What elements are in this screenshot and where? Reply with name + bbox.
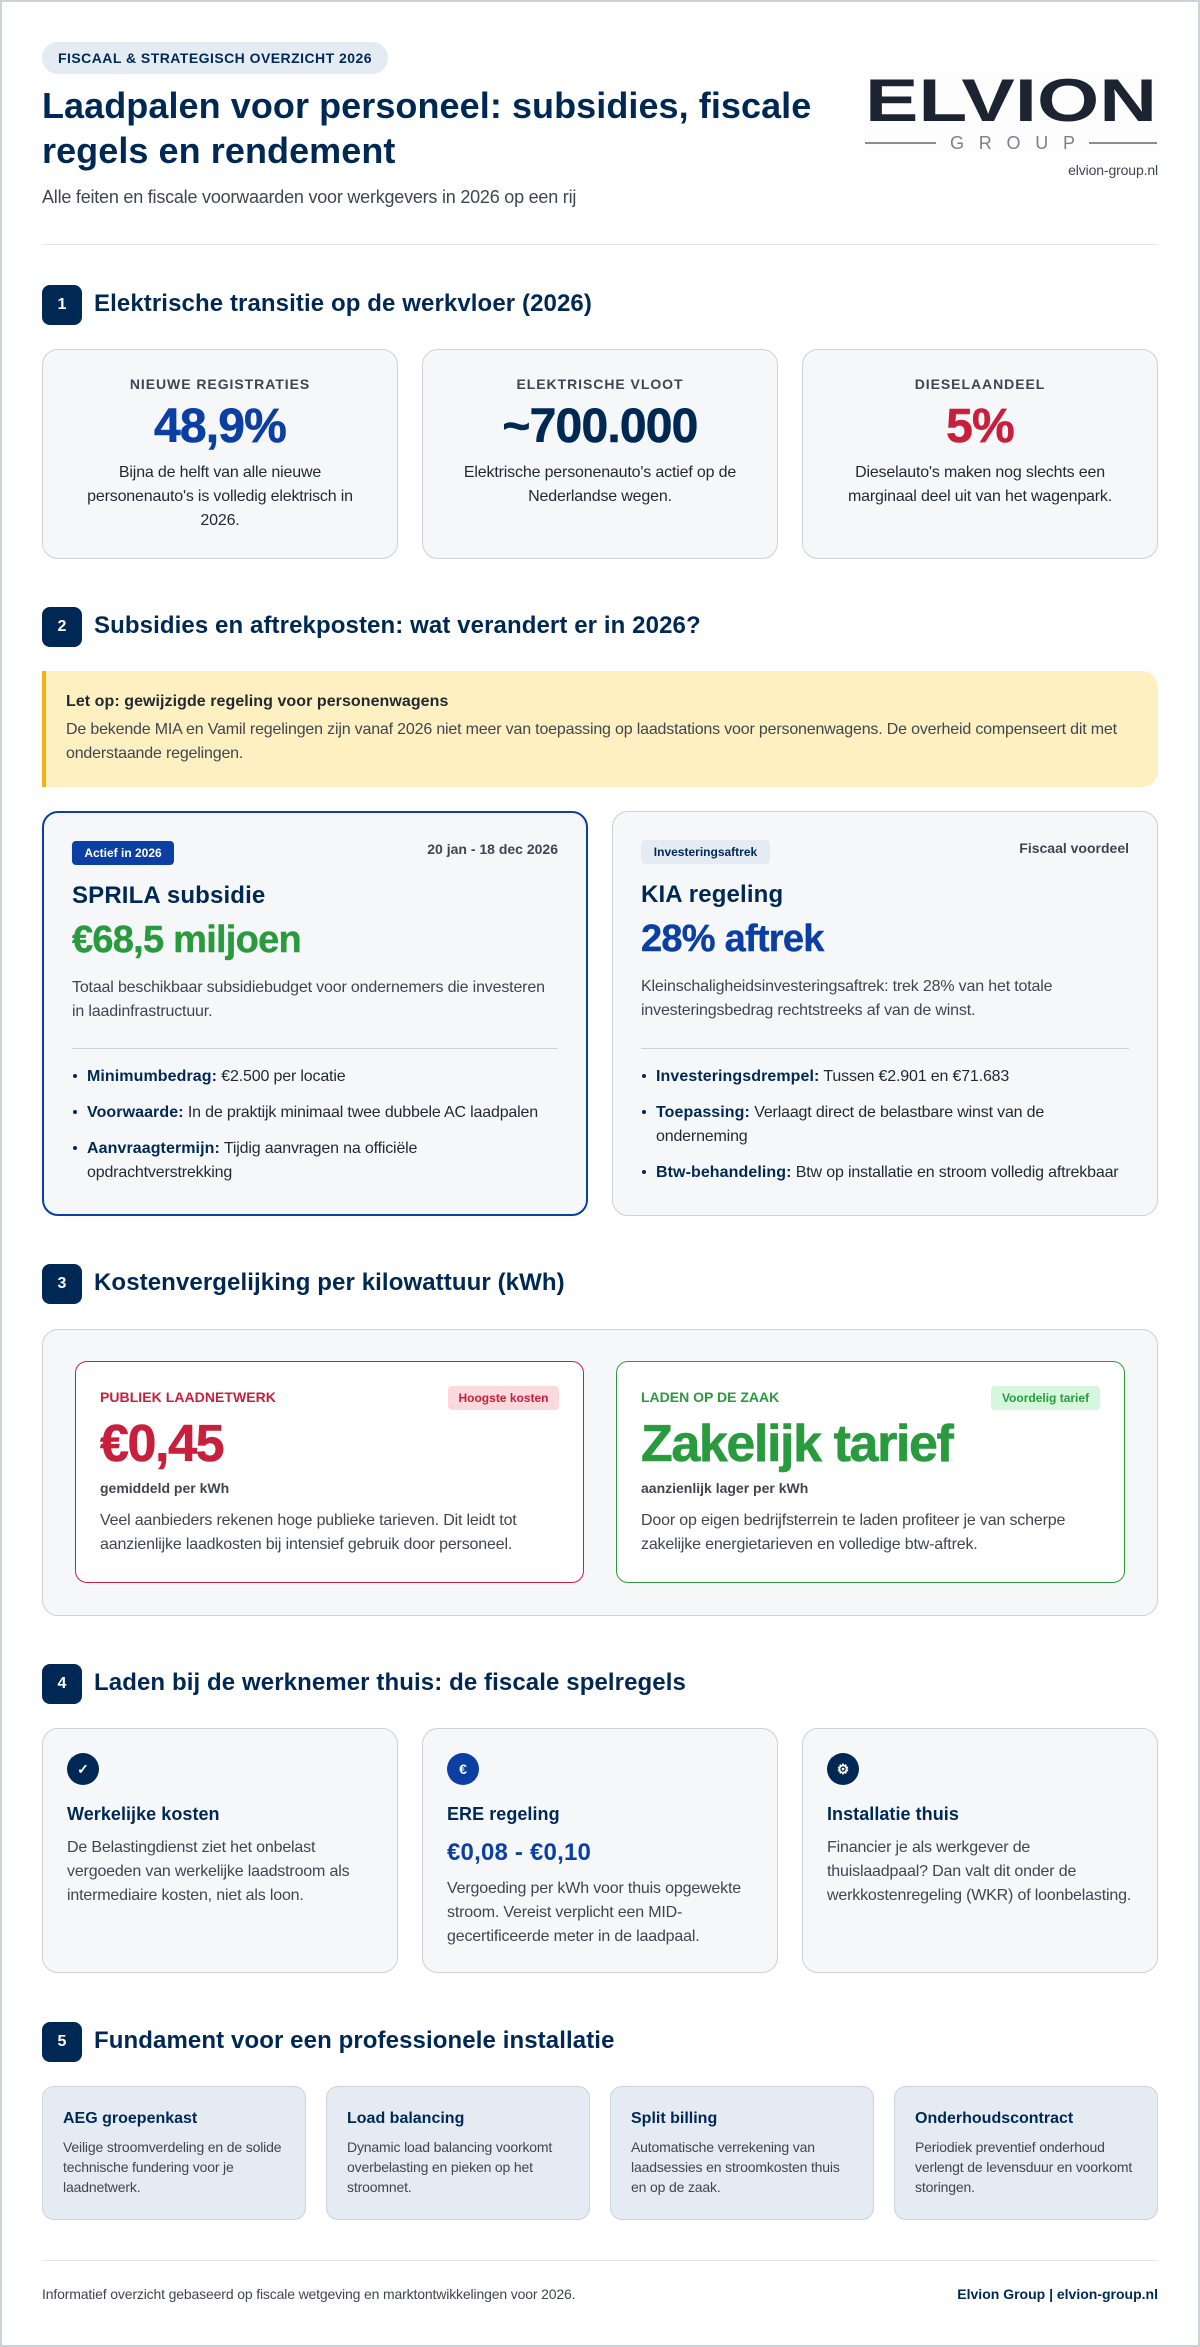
bullet list: Minimumbedrag: €2.500 per locatie [87, 1068, 345, 1085]
card title: ERE regeling [447, 1804, 560, 1824]
stat card: elektrische vloot [422, 349, 778, 559]
section 3 badge [42, 1264, 82, 1304]
stat card: dieselaandeel: marginaal deel uit van het wagenpark. [848, 488, 1112, 505]
icon: euro [447, 1753, 479, 1785]
bullet list: opdrachtverstrekking [87, 1164, 232, 1181]
description: aanzienlijke laadkosten bij intensief gebruik door personeel. [100, 1536, 512, 1553]
section 1 badge: 1 [58, 296, 66, 313]
card: onderhoudscontract [894, 2086, 1158, 2220]
tag: voordelig tarief [991, 1386, 1100, 1410]
section 2 heading: Subsidies en aftrekposten: wat verandert er in 2026? [94, 612, 701, 639]
tag: voordelig tarief: Voordelig tarief [1002, 1391, 1089, 1405]
tag: hoogste kosten: Hoogste kosten [458, 1391, 548, 1405]
benefit label: Fiscaal voordeel [1019, 840, 1129, 856]
stat card: nieuwe registraties: personenauto's is volledig elektrisch in [87, 488, 353, 505]
card text [67, 1839, 349, 1904]
label: PUBLIEK LAADNETWERK [100, 1389, 276, 1405]
website label: elvion-group.nl [1068, 162, 1158, 178]
stat card: dieselaandeel [802, 349, 1158, 559]
card: AEG groepenkast: technische fundering voor je [63, 2159, 234, 2175]
section 4 badge [42, 1664, 82, 1704]
card: installatie thuis [802, 1728, 1158, 1973]
description [641, 1512, 1065, 1553]
card: split billing: Split billing [631, 2110, 717, 2127]
icon: euro: € [459, 1761, 467, 1777]
stat card: nieuwe registraties: 2026. [200, 512, 240, 529]
card: split billing: laadsessies en stroomkosten thuis [631, 2159, 840, 2175]
section 2 badge [42, 607, 82, 647]
footer note: Informatief overzicht gebaseerd op fiscale wetgeving en marktontwikkelingen voor 2026. [42, 2286, 575, 2302]
card: load balancing: Dynamic load balancing voorkomt [347, 2139, 552, 2155]
callout: let op: onderstaande regelingen. [66, 745, 243, 762]
card: AEG groepenkast [42, 2086, 306, 2220]
card text: Vergoeding per kWh voor thuis opgewekte [447, 1880, 741, 1897]
bullet list: onderneming [656, 1128, 748, 1145]
stat card: nieuwe registraties: Bijna de helft van alle nieuwe [119, 464, 321, 481]
card: split billing: en op de zaak. [631, 2179, 721, 2195]
tag: actief in 2026 [72, 841, 174, 865]
description: Door op eigen bedrijfsterrein te laden profiteer je van scherpe [641, 1512, 1065, 1529]
card text [447, 1880, 741, 1945]
card: split billing [610, 2086, 874, 2220]
card text: vergoeden van werkelijke laadstroom als [67, 1863, 349, 1880]
tag: investeringsaftrek: Investeringsaftrek [654, 845, 757, 859]
card: onderhoudscontract: Periodiek preventief onderhoud [915, 2139, 1105, 2155]
price note: aanzienlijk lager per kWh [641, 1480, 808, 1496]
card: onderhoudscontract: storingen. [915, 2179, 975, 2195]
section 5 badge [42, 2022, 82, 2062]
stat card: elektrische vloot: Elektrische personenauto's actief op de [464, 464, 736, 481]
price: Zakelijk tarief [641, 1415, 952, 1473]
card text: stroom. Vereist verplicht een MID- [447, 1904, 682, 1921]
tag: investeringsaftrek [641, 840, 770, 864]
icon: gear: ⚙ [837, 1761, 849, 1777]
tariff: €0,08 - €0,10 [447, 1839, 591, 1866]
section 3 badge: 3 [58, 1275, 66, 1292]
icon: check: ✓ [77, 1761, 89, 1777]
stat card: nieuwe registraties [42, 349, 398, 559]
regulation amount: 28% aftrek [641, 918, 824, 960]
section 4 badge: 4 [58, 1675, 66, 1692]
section 1 heading: Elektrische transitie op de werkvloer (2026) [94, 290, 592, 317]
card: werkelijke kosten [42, 1728, 398, 1973]
date range: 20 jan - 18 dec 2026 [427, 841, 558, 857]
panel: KIA regeling [612, 811, 1158, 1216]
label: LADEN OP DE ZAAK [641, 1389, 779, 1405]
card: AEG groepenkast: laadnetwerk. [63, 2179, 140, 2195]
card text: intermediaire kosten, niet als loon. [67, 1887, 304, 1904]
subsidy name: SPRILA subsidie [72, 882, 265, 909]
bullet list: Btw-behandeling: Btw op installatie en stroom volledig aftrekbaar [656, 1164, 1118, 1181]
bullet list: Aanvraagtermijn: Tijdig aanvragen na officiële [87, 1140, 417, 1157]
stat card: dieselaandeel: 5% [946, 400, 1014, 453]
title [42, 85, 811, 171]
description: Veel aanbieders rekenen hoge publieke tarieven. Dit leidt tot [100, 1512, 517, 1529]
callout: let op: Let op: gewijzigde regeling voor personenwagens [66, 693, 448, 710]
comparison card: laden op de zaak [616, 1361, 1125, 1583]
price note: gemiddeld per kWh [100, 1480, 229, 1496]
subtitle: Alle feiten en fiscale voorwaarden voor werkgevers in 2026 op een rij [42, 187, 576, 207]
card: load balancing: stroomnet. [347, 2179, 412, 2195]
section 1 badge [42, 285, 82, 325]
bullet list: Toepassing: Verlaagt direct de belastbare winst van de [656, 1104, 1044, 1121]
section 5 heading: Fundament voor een professionele installatie [94, 2027, 615, 2054]
stat card: elektrische vloot: ~700.000 [502, 400, 698, 453]
title: Laadpalen voor personeel: subsidies, fiscale [42, 85, 811, 126]
stat card: elektrische vloot: ELEKTRISCHE VLOOT [516, 376, 684, 392]
title: regels en rendement [42, 130, 395, 171]
card: split billing: Automatische verrekening van [631, 2139, 815, 2155]
bullet list: Voorwaarde: In de praktijk minimaal twee dubbele AC laadpalen [87, 1104, 538, 1121]
section 5 badge: 5 [58, 2033, 66, 2050]
panel: kostenvergelijking [42, 1329, 1158, 1616]
card: AEG groepenkast: Veilige stroomverdeling en de solide [63, 2139, 281, 2155]
stat card: dieselaandeel: DIESELAANDEEL [915, 376, 1045, 392]
subsidy description: in laadinfrastructuur. [72, 1003, 212, 1020]
bullet list: Investeringsdrempel: Tussen €2.901 en €71.683 [656, 1068, 1009, 1085]
card title: Installatie thuis [827, 1804, 959, 1824]
regulation description: Kleinschaligheidsinvesteringsaftrek: trek 28% van het totale [641, 978, 1052, 995]
header pill [42, 42, 388, 74]
stat card: nieuwe registraties: NIEUWE REGISTRATIES [130, 376, 310, 392]
bullet list [73, 1068, 538, 1181]
description: zakelijke energietarieven en volledige btw-aftrek. [641, 1536, 978, 1553]
regulation name: KIA regeling [641, 881, 783, 908]
logo: Elvion Group: GROUP [950, 133, 1075, 153]
card title: Werkelijke kosten [67, 1804, 220, 1824]
section 2 badge: 2 [58, 618, 66, 635]
card text: gecertificeerde meter in de laadpaal. [447, 1928, 700, 1945]
card: load balancing [326, 2086, 590, 2220]
card: onderhoudscontract: verlengt de levensduur en voorkomt [915, 2159, 1132, 2175]
card text: werkkostenregeling (WKR) of loonbelasting. [827, 1887, 1131, 1904]
callout: let op: De bekende MIA en Vamil regelingen zijn vanaf 2026 niet meer van toepassing op laadstations voor personenwagens. De overheid compenseert dit met [66, 721, 1117, 738]
stat card: nieuwe registraties: 48,9% [154, 400, 286, 453]
section 3 heading: Kostenvergelijking per kilowattuur (kWh) [94, 1269, 565, 1296]
card text: Financier je als werkgever de [827, 1839, 1030, 1856]
bullet list [642, 1068, 1118, 1181]
panel: SPRILA subsidie [42, 811, 588, 1216]
price: €0,45 [100, 1415, 223, 1473]
section 4 heading: Laden bij de werknemer thuis: de fiscale spelregels [94, 1669, 686, 1696]
regulation description: investeringsbedrag rechtstreeks af van de winst. [641, 1002, 975, 1019]
card: ERE regeling [422, 1728, 778, 1973]
subsidy description [72, 979, 545, 1020]
card: AEG groepenkast: AEG groepenkast [63, 2110, 197, 2127]
comparison card: publiek laadnetwerk [75, 1361, 584, 1583]
card: load balancing: overbelasting en pieken op het [347, 2159, 533, 2175]
card text: De Belastingdienst ziet het onbelast [67, 1839, 315, 1856]
card text: thuislaadpaal? Dan valt dit onder de [827, 1863, 1076, 1880]
subsidy amount: €68,5 miljoen [72, 919, 301, 961]
tag: hoogste kosten [448, 1386, 559, 1410]
regulation description [641, 978, 1052, 1019]
description [100, 1512, 517, 1553]
icon: gear [827, 1753, 859, 1785]
logo: Elvion Group [865, 72, 1157, 153]
card text [827, 1839, 1131, 1904]
header pill: FISCAAL & STRATEGISCH OVERZICHT 2026 [58, 50, 372, 66]
footer brand: Elvion Group | elvion-group.nl [957, 2286, 1158, 2302]
card: load balancing: Load balancing [347, 2110, 464, 2127]
card: onderhoudscontract: Onderhoudscontract [915, 2110, 1073, 2127]
stat card: elektrische vloot: Nederlandse wegen. [528, 488, 672, 505]
icon: check [67, 1753, 99, 1785]
stat card: dieselaandeel: Dieselauto's maken nog slechts een [855, 464, 1105, 481]
tag: actief in 2026: Actief in 2026 [84, 846, 162, 860]
subsidy description: Totaal beschikbaar subsidiebudget voor ondernemers die investeren [72, 979, 545, 996]
callout: let op [42, 671, 1158, 787]
